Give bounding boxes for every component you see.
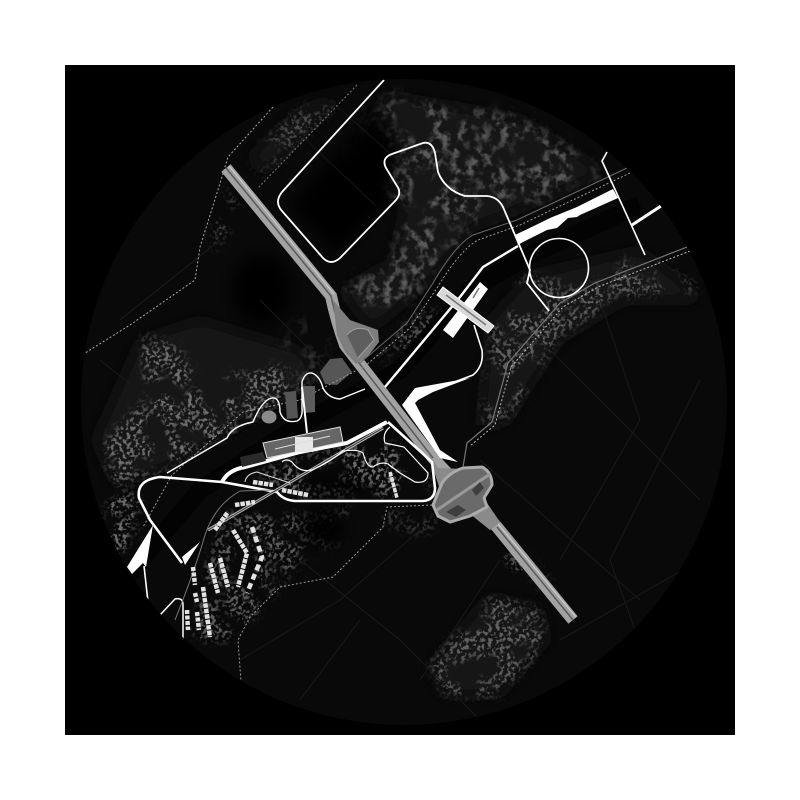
left spur line xyxy=(144,566,148,602)
map ground xyxy=(65,65,735,735)
sports court two xyxy=(303,386,315,413)
east branch thick line xyxy=(632,206,661,225)
dark shadow patches xyxy=(232,105,400,546)
roundabout road across xyxy=(437,474,490,510)
station plaza xyxy=(295,437,313,452)
east dotted road xyxy=(463,247,687,467)
housing row east xyxy=(390,472,397,498)
roundabout dark planting xyxy=(446,482,484,517)
winding north path xyxy=(167,373,365,473)
highway xyxy=(226,166,576,620)
building bar east xyxy=(515,189,618,245)
soft vegetation glow xyxy=(95,95,705,695)
faint street network xyxy=(100,100,700,720)
south dotted boundary xyxy=(238,505,432,682)
small plaza xyxy=(262,410,276,424)
housing row crescent one xyxy=(233,530,247,587)
fine vegetation texture xyxy=(95,95,700,695)
upper rail dotted line xyxy=(143,173,630,527)
cross white wing xyxy=(443,282,488,338)
site plan map xyxy=(65,65,735,735)
housing blocks xyxy=(187,472,397,637)
diagonal double road xyxy=(208,428,383,530)
black square background xyxy=(65,65,735,735)
forest texture xyxy=(280,95,605,385)
small oval plaza xyxy=(320,358,352,385)
winding south path two xyxy=(245,472,290,483)
station connector xyxy=(302,387,307,433)
roundabout flare north xyxy=(428,452,458,486)
river channel xyxy=(386,308,450,374)
station roof xyxy=(263,427,343,458)
diagonal road centre xyxy=(208,428,383,530)
housing rows south xyxy=(203,558,228,637)
road deck xyxy=(226,168,573,620)
roundabout flare south xyxy=(472,503,500,530)
upper rail corridor xyxy=(360,168,627,363)
cross building xyxy=(437,282,494,338)
thin grey path xyxy=(175,490,272,620)
sports court one xyxy=(285,391,298,419)
northwest dotted boundary xyxy=(82,107,273,355)
white path north block xyxy=(278,80,549,311)
lower roundabout xyxy=(428,452,500,530)
cross hatched wing xyxy=(437,287,494,333)
path to wedge xyxy=(455,324,484,381)
ring path xyxy=(530,238,588,298)
main loop path xyxy=(139,422,435,563)
lane markings xyxy=(226,168,573,620)
east boundary line xyxy=(602,152,645,255)
southwest spur path xyxy=(160,599,183,640)
housing row central xyxy=(215,482,308,530)
roundabout island xyxy=(433,467,492,522)
river promenade line xyxy=(385,246,518,387)
west thick promenade xyxy=(222,422,387,482)
station roof stripe xyxy=(275,436,330,449)
housing row crescent two xyxy=(247,527,262,593)
interchange inner loop xyxy=(347,328,374,358)
upper interchange xyxy=(333,300,379,364)
angular wedge walkway xyxy=(402,378,470,462)
cross deck detail xyxy=(446,288,486,325)
left wedge xyxy=(127,525,153,574)
middle wedge xyxy=(182,542,200,565)
housing rows far south xyxy=(187,567,199,630)
highway edge xyxy=(229,166,576,617)
dark annex xyxy=(240,452,266,467)
east dotted road edge xyxy=(470,251,690,446)
winding south path one xyxy=(282,427,428,482)
central station building xyxy=(263,427,343,458)
circular map xyxy=(65,65,735,735)
north dotted line xyxy=(258,85,357,188)
